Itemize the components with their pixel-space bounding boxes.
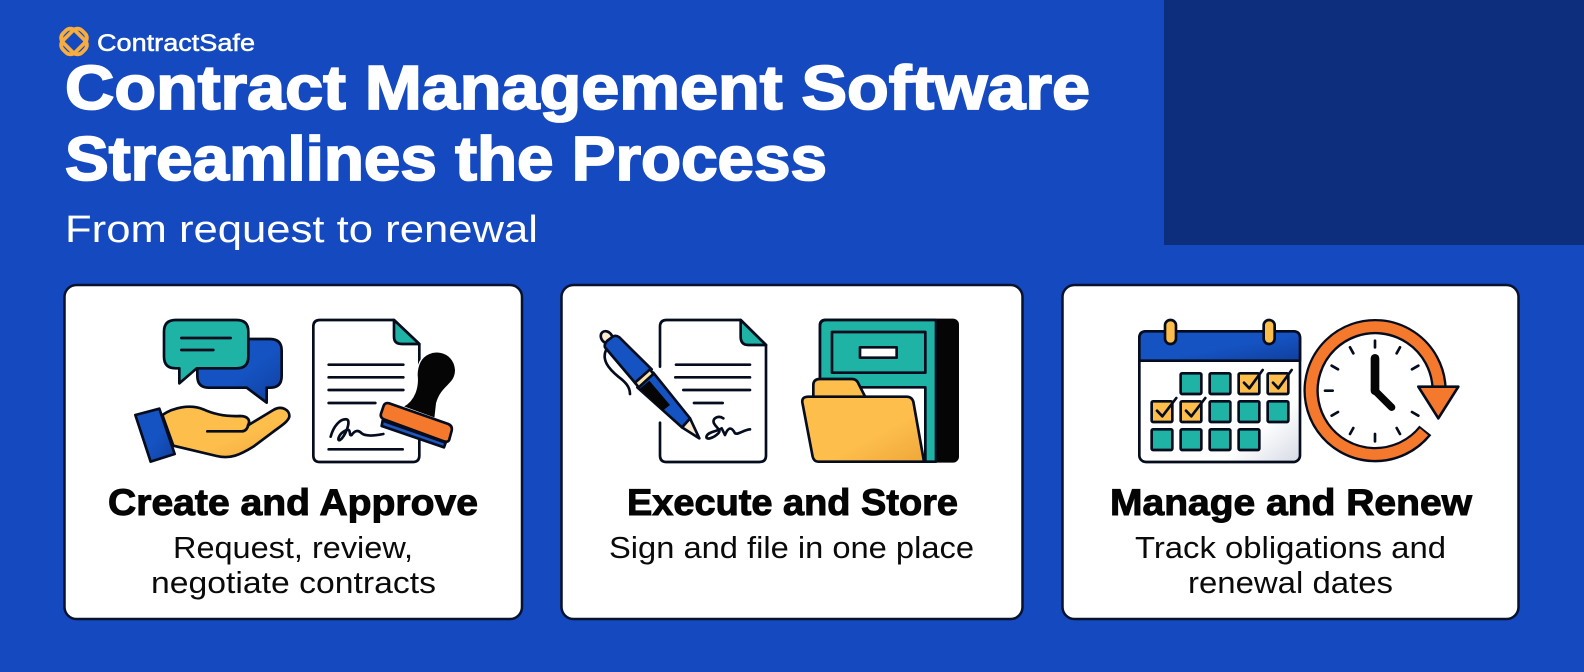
icon: speech bubbles over open hand — [135, 320, 289, 462]
description: Sign and file in one place — [609, 530, 974, 565]
heading: Create and Approve — [108, 482, 478, 523]
icon: signed document with stamp — [313, 320, 456, 462]
description — [1135, 530, 1446, 600]
icon: calendar with checks — [1139, 320, 1300, 462]
description: Track obligations and — [1135, 530, 1446, 565]
title: Streamlines the Process — [65, 125, 827, 194]
panel: Execute and Store — [562, 285, 1022, 619]
panel: Create and Approve — [64, 285, 522, 619]
icon: filing cabinet with folder — [802, 319, 959, 463]
logo: ContractSafe — [58, 26, 255, 57]
card background — [562, 285, 1022, 619]
description — [151, 530, 436, 600]
icon: pen signing document — [598, 320, 766, 462]
heading: Manage and Renew — [1110, 482, 1472, 523]
dark corner panel — [1164, 0, 1584, 245]
icon: logo mark — [58, 26, 90, 57]
icon: clock with renewal arrow — [1311, 327, 1458, 455]
description: negotiate contracts — [151, 565, 436, 600]
description: Request, review, — [173, 530, 413, 565]
description: renewal dates — [1188, 565, 1393, 600]
heading: Execute and Store — [627, 482, 958, 523]
card background — [64, 285, 522, 619]
logo wordmark: ContractSafe — [97, 30, 255, 57]
panel: Manage and Renew — [1062, 285, 1518, 619]
title: Contract Management Software — [65, 54, 1090, 123]
card background — [1062, 285, 1518, 619]
title — [65, 54, 1090, 194]
subtitle: From request to renewal — [65, 209, 538, 251]
